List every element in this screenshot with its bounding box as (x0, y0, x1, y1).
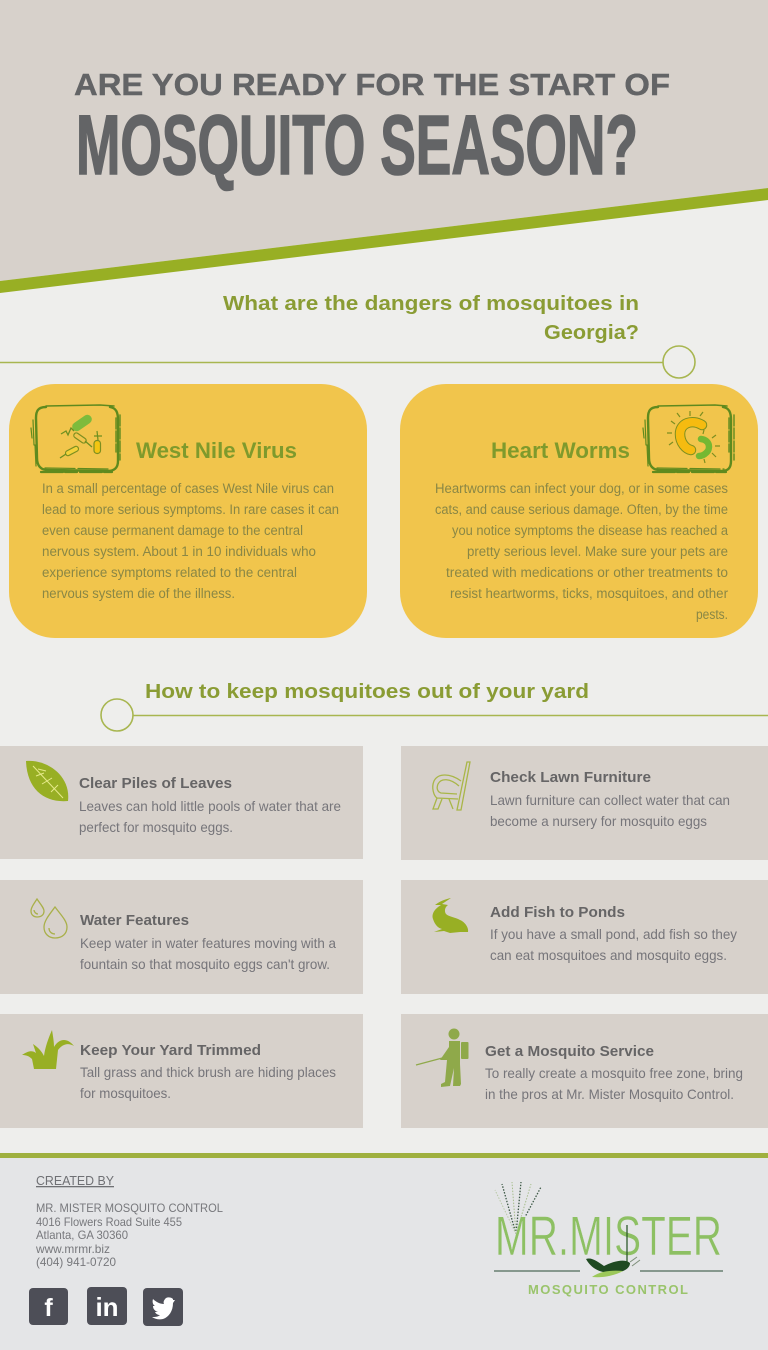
tip text: Water Features (80, 912, 189, 929)
card body text: you notice symptoms the disease has reached a (452, 523, 728, 538)
panel: add fish to ponds (401, 880, 768, 994)
icon: linkedin: in (95, 1292, 119, 1322)
card body text: treated with medications or other treatments to (446, 565, 728, 580)
panel: Heart Worms (400, 384, 758, 638)
tip text (79, 775, 341, 835)
icon: facebook: f (44, 1294, 53, 1322)
heading: dangers: Georgia? (544, 322, 639, 344)
panel: keep your yard trimmed (0, 1014, 363, 1128)
contact details: www.mrmr.biz (35, 1242, 110, 1256)
card body text: In a small percentage of cases West Nile virus can (42, 481, 334, 496)
tip text: Leaves can hold little pools of water that are (79, 798, 341, 814)
tip text: Lawn furniture can collect water that can (490, 792, 730, 808)
divider with circle: dangers (0, 346, 695, 378)
card body text: Heartworms can infect your dog, or in some cases (435, 481, 728, 496)
tip text (490, 769, 730, 829)
icon: linkedin (87, 1287, 127, 1325)
tip text (80, 912, 336, 972)
card body text (42, 481, 339, 601)
card body text: cats, and cause serious damage. Often, by the time (435, 502, 728, 517)
icon: twitter (143, 1288, 183, 1326)
title (74, 67, 670, 192)
contact details: MR. MISTER MOSQUITO CONTROL (36, 1201, 223, 1215)
tip text: Keep Your Yard Trimmed (80, 1042, 261, 1059)
tip text (80, 1042, 336, 1101)
logo subtitle: MOSQUITO CONTROL (528, 1282, 688, 1297)
contact details: Atlanta, GA 30360 (36, 1228, 128, 1242)
card title: West Nile Virus (136, 438, 297, 463)
title: ARE YOU READY FOR THE START OF (74, 67, 670, 102)
tip text (490, 904, 737, 963)
icon: leaf (26, 761, 68, 801)
contact details (35, 1201, 223, 1269)
card body text: pests. (696, 607, 728, 622)
tip text: Clear Piles of Leaves (79, 775, 232, 792)
card body text: even cause permanent damage to the central (42, 523, 303, 538)
icon: heart worms frame (643, 405, 734, 472)
header banner (0, 0, 768, 293)
icon: facebook (29, 1288, 68, 1325)
divider with circle: keep out (101, 699, 768, 731)
panel: get a mosquito service (401, 1014, 768, 1128)
panel: water features (0, 880, 363, 994)
card body text: nervous system die of the illness. (42, 586, 235, 601)
tip text (485, 1043, 743, 1102)
card body text: nervous system. About 1 in 10 individuals who (42, 544, 316, 559)
icon: water drops (31, 899, 67, 938)
tip text: fountain so that mosquito eggs can't grow. (80, 956, 330, 972)
created by heading: CREATED BY (36, 1173, 114, 1188)
tip text: Get a Mosquito Service (485, 1043, 654, 1060)
tip text: Keep water in water features moving with a (80, 935, 336, 951)
tip text: Add Fish to Ponds (490, 904, 625, 921)
panel: check lawn furniture (401, 746, 768, 860)
icon: fish (433, 898, 468, 933)
contact details: 4016 Flowers Road Suite 455 (36, 1215, 182, 1229)
heading: dangers (223, 293, 639, 344)
tip text: for mosquitoes. (80, 1085, 171, 1101)
tip text: Tall grass and thick brush are hiding places (80, 1064, 336, 1080)
heading: keep mosquitoes out: How to keep mosquitoes out of your yard (145, 681, 589, 703)
tip text: perfect for mosquito eggs. (79, 819, 233, 835)
icon: grass (22, 1030, 74, 1069)
panel: clear piles of leaves (0, 746, 363, 859)
footer (0, 1153, 768, 1350)
icon: sprayer person (416, 1028, 468, 1087)
card body text: lead to more serious symptoms. In rare cases it can (42, 502, 339, 517)
tip text: To really create a mosquito free zone, bring (485, 1065, 743, 1081)
panel: West Nile Virus (9, 384, 367, 638)
tip text: in the pros at Mr. Mister Mosquito Control. (485, 1086, 734, 1102)
tip text: can eat mosquitoes and mosquito eggs. (490, 947, 727, 963)
green diagonal stripe (0, 188, 768, 293)
spray lines (495, 1182, 541, 1234)
card body text (435, 481, 728, 622)
contact details: (404) 941-0720 (36, 1255, 116, 1269)
mosquito mark (586, 1225, 640, 1277)
heading: dangers: What are the dangers of mosquitoes in (223, 293, 639, 315)
logo rules (494, 1270, 723, 1272)
icon: lawn chair (433, 762, 470, 810)
card title: Heart Worms (491, 438, 630, 463)
tip text: become a nursery for mosquito eggs (490, 813, 707, 829)
icon: virus frame (31, 405, 120, 472)
card body text: resist heartworms, ticks, mosquitoes, and other (450, 586, 728, 601)
card body text: pretty serious level. Make sure your pets are (467, 544, 728, 559)
card body text: experience symptoms related to the central (42, 565, 297, 580)
tip text: If you have a small pond, add fish so they (490, 926, 737, 942)
logo: Mr. Mister Mosquito Control (494, 1182, 723, 1297)
tip text: Check Lawn Furniture (490, 769, 651, 786)
